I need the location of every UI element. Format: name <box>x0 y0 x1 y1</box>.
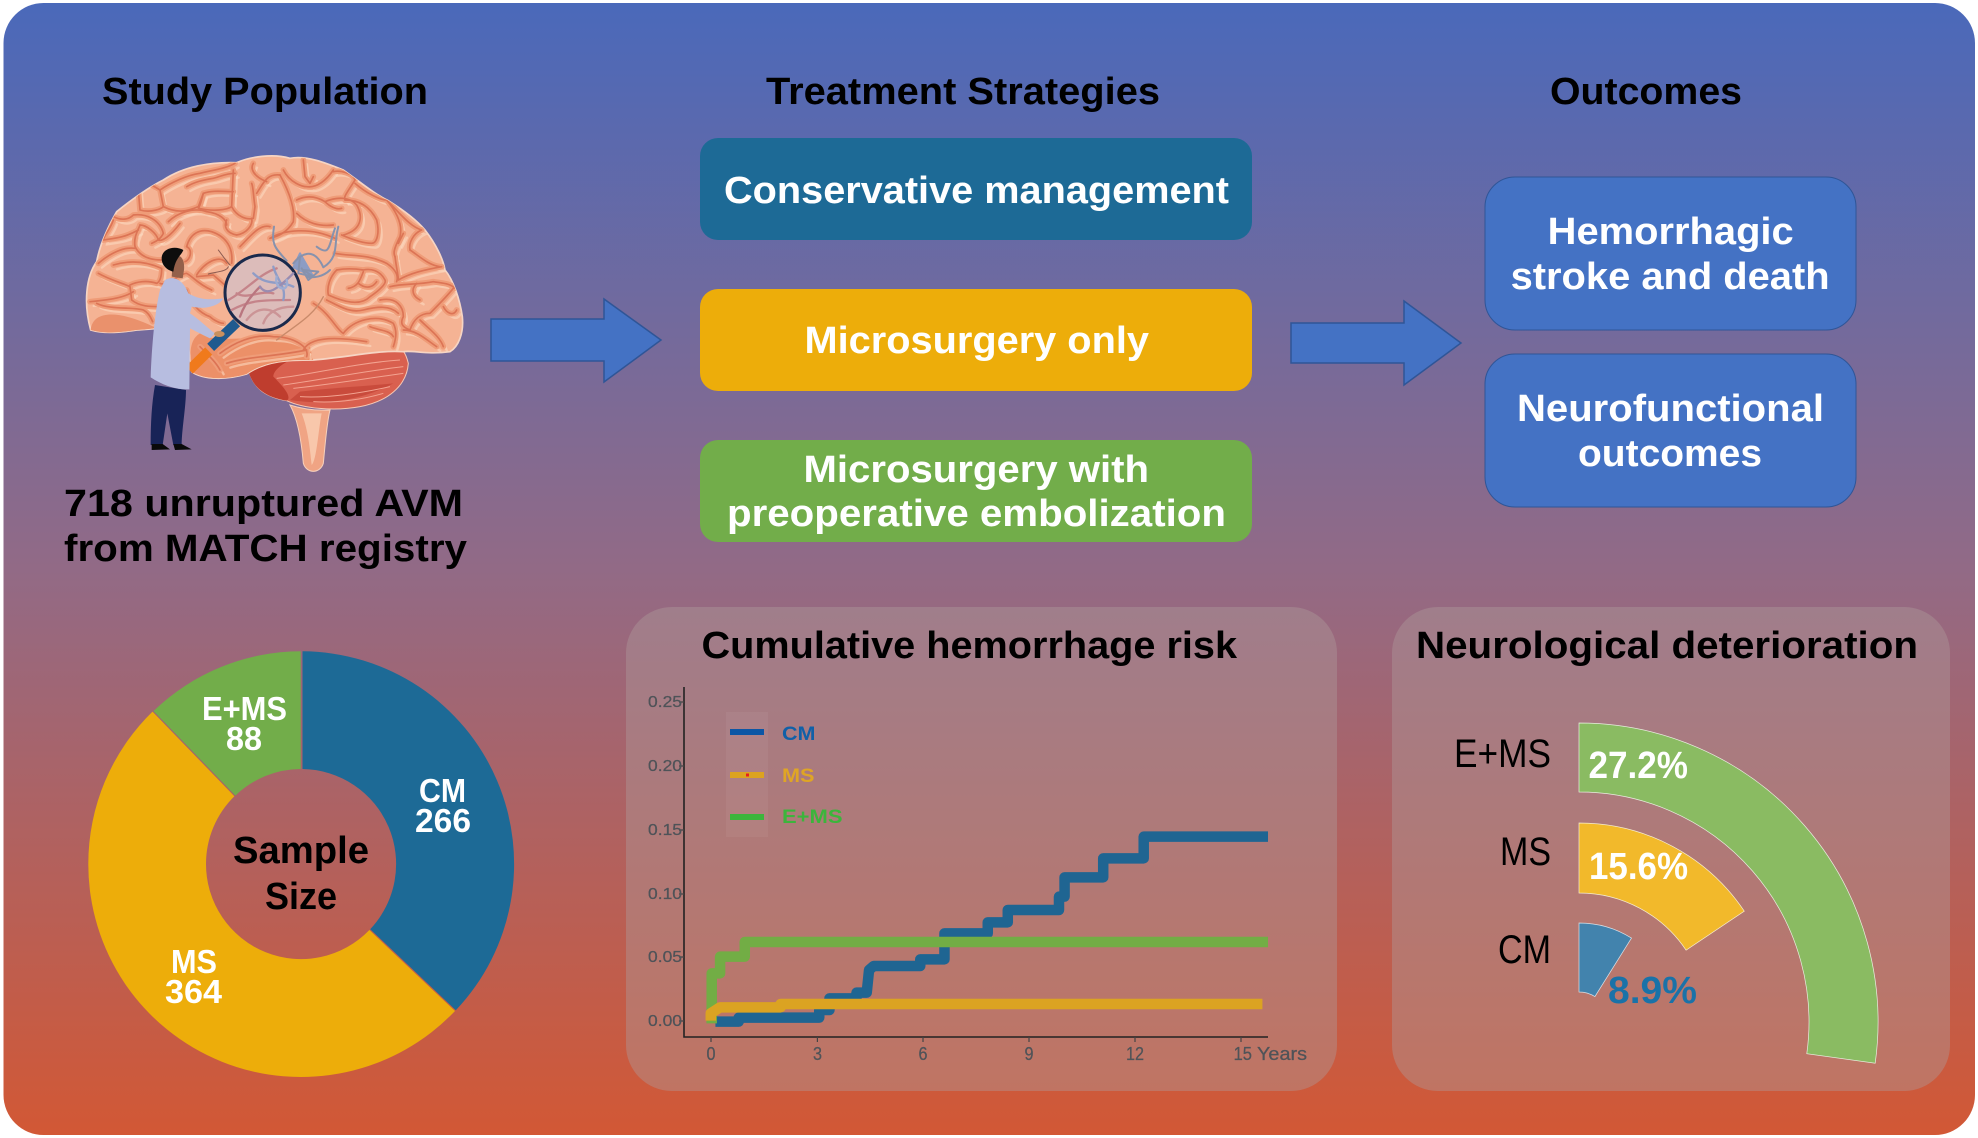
box: microsurgery with embolization <box>700 440 1252 542</box>
slice: MS <box>88 712 455 1077</box>
label: MS count <box>165 943 223 1010</box>
box: microsurgery with embolization: preoperative embolization <box>727 493 1226 535</box>
box: microsurgery only <box>700 289 1252 391</box>
chart: risk curves <box>648 687 1307 1064</box>
icon: doctor <box>151 248 225 450</box>
y axis labels: 0.15 <box>648 822 682 839</box>
caption: sample description: from MATCH registry <box>64 528 467 570</box>
curve: E+MS <box>712 942 1268 1023</box>
x axis labels <box>706 1044 1307 1064</box>
value: MS: 15.6% <box>1589 846 1688 888</box>
label: E+MS count: 88 <box>226 720 262 757</box>
label: E+MS count: E+MS <box>202 690 287 727</box>
icon: cerebrum <box>87 156 463 378</box>
icon: magnifier <box>189 255 300 370</box>
label: MS count: 364 <box>165 973 223 1010</box>
box: neurofunctional outcomes <box>1485 354 1856 507</box>
label: CM count: CM <box>419 772 466 809</box>
x axis labels: 15 <box>1234 1044 1252 1064</box>
heading: study population: Study Population <box>102 71 428 113</box>
label: CM count: 266 <box>415 802 471 839</box>
heading: treatment strategies: Treatment Strategies <box>766 71 1160 113</box>
slice: CM <box>302 651 514 1010</box>
y axis labels: 0.10 <box>648 886 682 903</box>
legend: CM <box>782 724 816 745</box>
curve: CM <box>715 837 1268 1022</box>
label: sample size: Size <box>265 876 337 918</box>
label: sample size: Sample <box>233 830 369 872</box>
label: E+MS: E+MS <box>1454 732 1551 776</box>
slice: E+MS <box>154 651 301 796</box>
label: CM: CM <box>1498 928 1551 972</box>
x axis labels: 0 <box>706 1044 716 1064</box>
bar: MS <box>1579 823 1744 950</box>
value: E+MS: 27.2% <box>1588 745 1688 787</box>
bar: E+MS <box>1579 723 1878 1063</box>
x axis labels: 12 <box>1126 1044 1144 1064</box>
box: hemorrhagic stroke and death: Hemorrhagic <box>1548 211 1794 253</box>
legend: E+MS <box>782 807 842 828</box>
label: sample size <box>233 830 369 918</box>
icon: vessel nidus <box>208 227 338 340</box>
box: conservative management: Conservative management <box>724 170 1229 212</box>
y axis labels <box>648 694 682 1030</box>
x axis labels: Years <box>1257 1044 1307 1064</box>
icon: brainstem <box>290 405 330 471</box>
panel heading: Neurological deterioration <box>1416 625 1918 667</box>
panel heading: Cumulative hemorrhage risk <box>702 625 1238 667</box>
curve: MS <box>711 1004 1262 1021</box>
box: conservative management <box>700 138 1252 240</box>
box: hemorrhagic stroke and death: stroke and death <box>1511 256 1830 298</box>
box: microsurgery only: Microsurgery only <box>804 320 1149 362</box>
label: E+MS count <box>202 690 287 757</box>
panel: cumulative hemorrhage risk <box>626 607 1337 1091</box>
box: neurofunctional outcomes: Neurofunctional <box>1517 388 1824 430</box>
box: hemorrhagic stroke and death <box>1485 177 1856 330</box>
y axis labels: 0.05 <box>648 949 682 966</box>
x axis labels: 9 <box>1024 1044 1034 1064</box>
legend <box>726 712 842 837</box>
label: MS count: MS <box>171 943 217 980</box>
label: MS: MS <box>1500 830 1551 874</box>
caption: sample description <box>64 483 467 570</box>
arrow: treatment to outcomes <box>1291 301 1461 385</box>
legend: MS <box>782 766 814 787</box>
illustration: brain with doctor and magnifier <box>87 156 463 471</box>
y axis labels: 0.20 <box>648 758 682 775</box>
y axis labels: 0.00 <box>648 1013 682 1030</box>
box: neurofunctional outcomes: outcomes <box>1578 433 1762 475</box>
icon: cerebellum <box>248 351 408 409</box>
axes <box>684 687 1268 1037</box>
value: CM: 8.9% <box>1608 970 1697 1012</box>
heading: outcomes: Outcomes <box>1550 71 1742 113</box>
panel: neurological deterioration <box>1392 607 1950 1091</box>
x axis labels: 3 <box>813 1044 822 1064</box>
arrow: population to treatment <box>491 299 661 382</box>
chart: radial bars <box>1454 723 1878 1063</box>
label: CM count <box>415 772 471 839</box>
y axis labels: 0.25 <box>648 694 682 711</box>
box: microsurgery with embolization: Microsurgery with <box>804 449 1149 491</box>
caption: sample description: 718 unruptured AVM <box>64 483 463 525</box>
bar: CM <box>1579 923 1632 997</box>
donut chart: sample size <box>88 651 514 1077</box>
x axis labels: 6 <box>918 1044 928 1064</box>
